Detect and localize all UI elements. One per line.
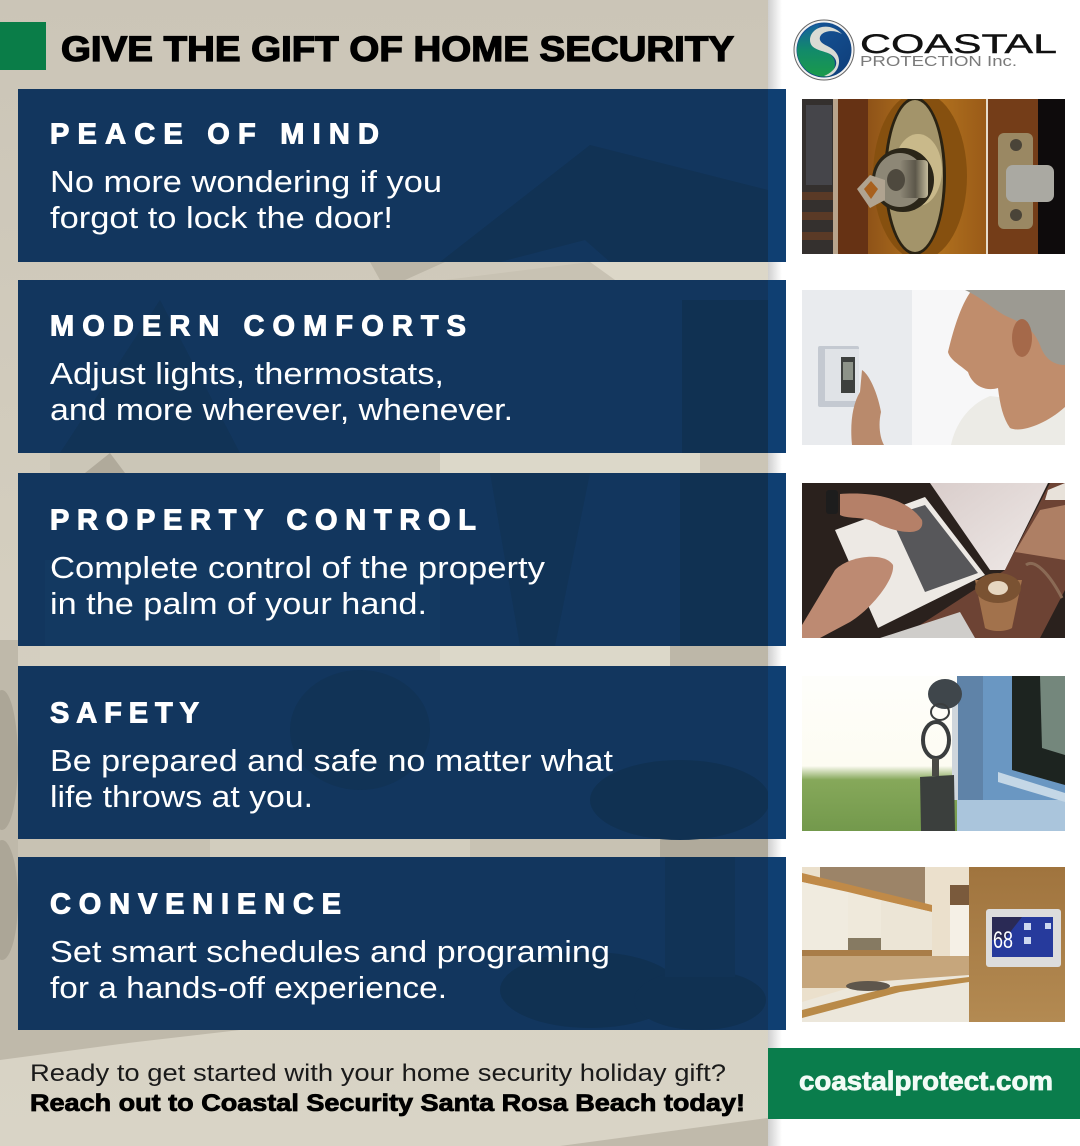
smart thermostat	[986, 909, 1061, 967]
body text	[50, 164, 442, 235]
body text: in the palm of your hand.	[50, 586, 427, 621]
panel: peace of mind	[18, 89, 786, 262]
body text: Complete control of the property	[50, 550, 546, 585]
photo: man adjusting thermostat	[802, 290, 1065, 445]
website url: coastalprotect.com	[799, 1066, 1053, 1096]
panel: safety	[18, 666, 786, 840]
logo mark	[794, 20, 854, 80]
heading: PROPERTY CONTROL	[50, 504, 476, 536]
logo	[794, 20, 1057, 80]
title accent block	[0, 22, 46, 70]
heading: MODERN COMFORTS	[50, 310, 466, 342]
key and fob	[920, 679, 962, 831]
photo: hands on laptop with coffee	[802, 483, 1065, 638]
smart thermostat: 68	[993, 927, 1013, 954]
background: faded house photo	[0, 0, 768, 1146]
body text	[50, 743, 613, 814]
body text: Set smart schedules and programing	[50, 934, 610, 969]
body text: Adjust lights, thermostats,	[50, 356, 444, 391]
photo: door deadbolt	[802, 92, 1065, 260]
white column shadow	[768, 0, 782, 1146]
call to action line 1: Ready to get started with your home security holiday gift?	[30, 1060, 726, 1087]
photo: key in blue door	[802, 676, 1065, 831]
body text: forgot to lock the door!	[50, 200, 393, 235]
body text	[50, 550, 546, 621]
thermostat	[818, 346, 859, 407]
body text: Be prepared and safe no matter what	[50, 743, 613, 778]
logo wordmark: COASTAL	[860, 29, 1057, 59]
panel: property control	[18, 473, 786, 646]
body text	[50, 934, 610, 1005]
body text: No more wondering if you	[50, 164, 442, 199]
coffee cup	[975, 573, 1022, 631]
body text: and more wherever, whenever.	[50, 392, 513, 427]
heading: CONVENIENCE	[50, 888, 341, 920]
website banner	[768, 1048, 1080, 1119]
body text: life throws at you.	[50, 779, 313, 814]
logo tagline: PROTECTION Inc.	[860, 54, 1017, 70]
title: GIVE THE GIFT OF HOME SECURITY	[61, 30, 734, 69]
body text: for a hands-off experience.	[50, 970, 447, 1005]
panel: convenience	[18, 857, 786, 1030]
body text	[50, 356, 513, 427]
call to action text	[30, 1060, 745, 1117]
photo: kitchen with smart thermostat	[802, 867, 1065, 1022]
heading: PEACE OF MIND	[50, 118, 379, 150]
heading: SAFETY	[50, 698, 199, 730]
call to action line 2: Reach out to Coastal Security Santa Rosa Beach today!	[30, 1090, 745, 1117]
panel: modern comforts	[18, 280, 786, 453]
